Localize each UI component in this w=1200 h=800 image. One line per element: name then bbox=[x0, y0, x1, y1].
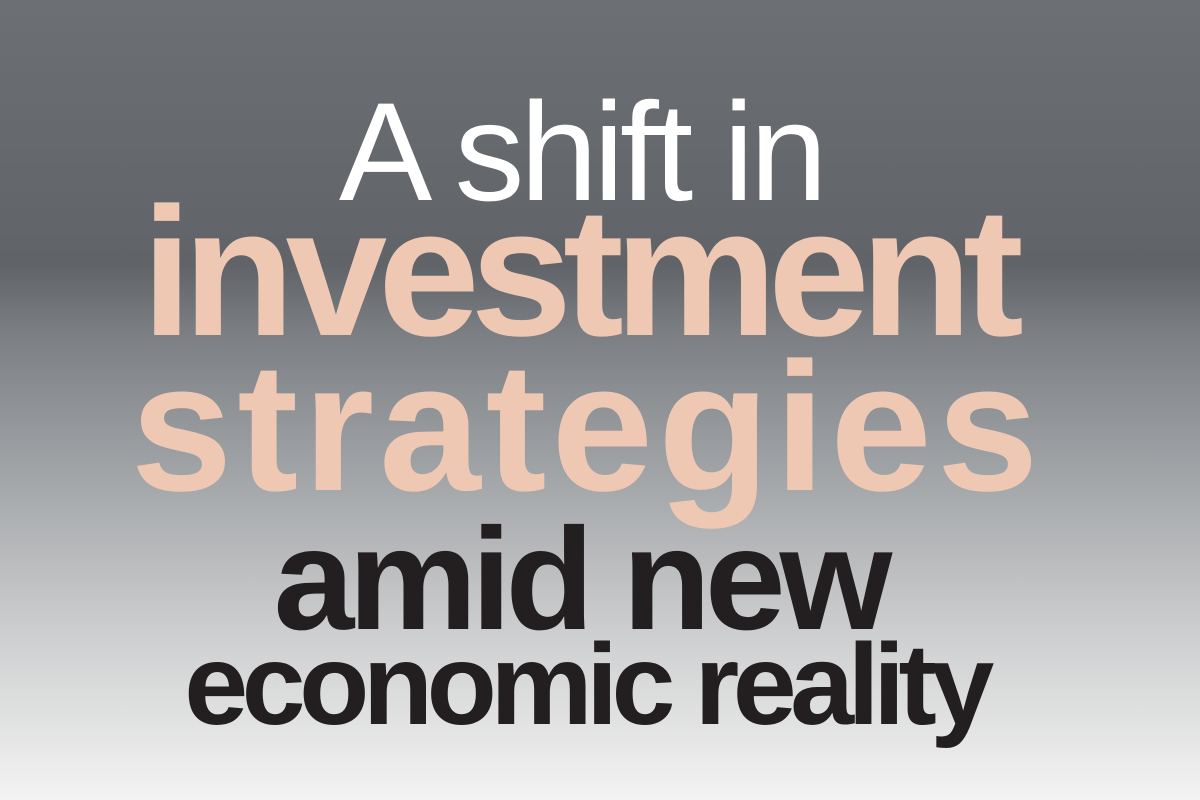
heading line 4: amid new: amid new bbox=[274, 498, 886, 660]
heading line 5: economic reality: economic reality bbox=[184, 621, 988, 749]
heading line 3: strategies: strategies bbox=[131, 324, 1043, 529]
heading line 2: investment: investment bbox=[141, 169, 1015, 374]
heading line 1: A shift in: A shift in bbox=[339, 73, 823, 230]
